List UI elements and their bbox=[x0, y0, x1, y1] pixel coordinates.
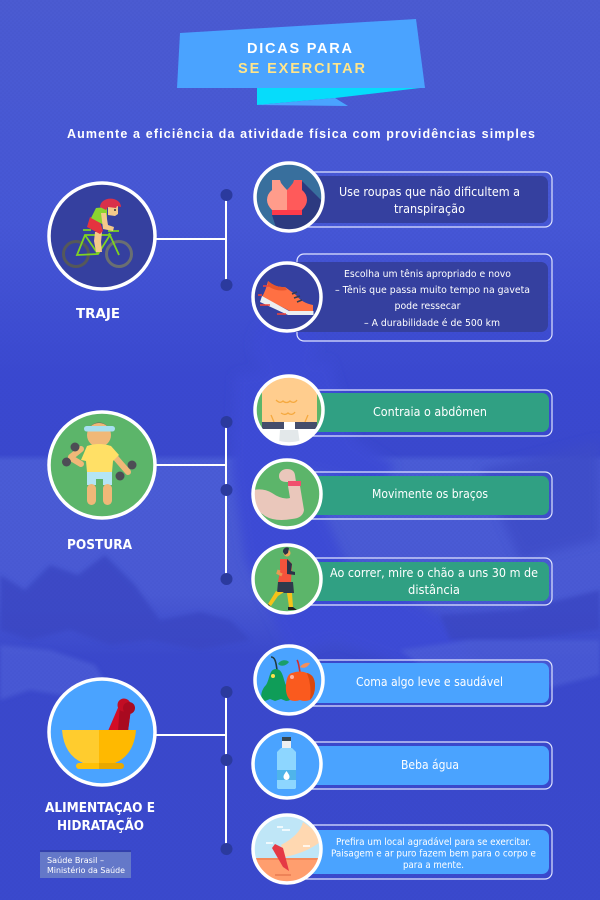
panel: correr bbox=[290, 558, 552, 605]
panel: local: Prefira um local agradável para se exercitar. bbox=[336, 836, 531, 848]
label: traje: TRAJE bbox=[76, 307, 120, 322]
icon: man with dumbbells bbox=[49, 412, 155, 518]
title banner: SE EXERCITAR bbox=[238, 61, 366, 77]
label: alimentacao e hidratacao bbox=[45, 801, 155, 834]
panel: local bbox=[290, 825, 552, 879]
panel: tenis: – Tênis que passa muito tempo na gaveta bbox=[335, 284, 530, 296]
icon: sports top bbox=[255, 163, 326, 240]
panel: roupas: Use roupas que não dificultem a bbox=[339, 185, 520, 199]
icon: cyclist bbox=[49, 183, 155, 289]
icon: runner bbox=[253, 545, 321, 613]
connector: traje bbox=[155, 189, 232, 291]
label: alimentacao e hidratacao: HIDRATAÇÃO bbox=[57, 818, 144, 834]
label: alimentacao e hidratacao: ALIMENTAÇAO E bbox=[45, 801, 155, 816]
icon: running foot bbox=[250, 815, 325, 888]
title banner: DICAS PARA bbox=[247, 41, 353, 57]
icon: abdomen bbox=[253, 374, 325, 446]
panel: coma: Coma algo leve e saudável bbox=[356, 675, 503, 689]
label: postura: POSTURA bbox=[67, 538, 132, 553]
panel: tenis: pode ressecar bbox=[394, 301, 461, 312]
panel: correr: distância bbox=[408, 583, 460, 597]
icon: fruit bbox=[255, 646, 323, 714]
panel: tenis bbox=[290, 254, 552, 341]
panel: coma bbox=[290, 660, 552, 706]
panel: agua bbox=[290, 742, 552, 789]
panel: bracos: Movimente os braços bbox=[372, 487, 488, 501]
source box bbox=[40, 850, 131, 878]
icon: mortar and pestle bbox=[49, 679, 155, 785]
panel: roupas: transpiração bbox=[394, 202, 465, 216]
panel: roupas bbox=[290, 172, 552, 227]
panel: agua: Beba água bbox=[401, 758, 459, 772]
panel: correr: Ao correr, mire o chão a uns 30 m de bbox=[330, 566, 538, 580]
panel: abdomen bbox=[290, 390, 552, 436]
panel: tenis: – A durabilidade é de 500 km bbox=[364, 317, 500, 329]
panel: abdomen: Contraia o abdômen bbox=[373, 405, 487, 419]
panel: local: para a mente. bbox=[403, 860, 464, 871]
source box: Saúde Brasil – bbox=[47, 856, 104, 865]
icon: running shoe bbox=[253, 263, 321, 331]
source box: Ministério da Saúde bbox=[47, 865, 125, 875]
panel: tenis: Escolha um tênis apropriado e novo bbox=[344, 268, 511, 280]
connector: alimentacao bbox=[155, 686, 232, 855]
panel: local: Paisagem e ar puro fazem bem para o corpo e bbox=[331, 848, 536, 860]
title banner bbox=[177, 19, 425, 106]
icon: water bottle bbox=[253, 730, 321, 798]
connector: postura bbox=[155, 416, 232, 585]
panel: bracos bbox=[290, 472, 552, 519]
subtitle: Aumente a eficiência da atividade física com providências simples bbox=[67, 127, 535, 141]
icon: arm bbox=[250, 460, 321, 528]
